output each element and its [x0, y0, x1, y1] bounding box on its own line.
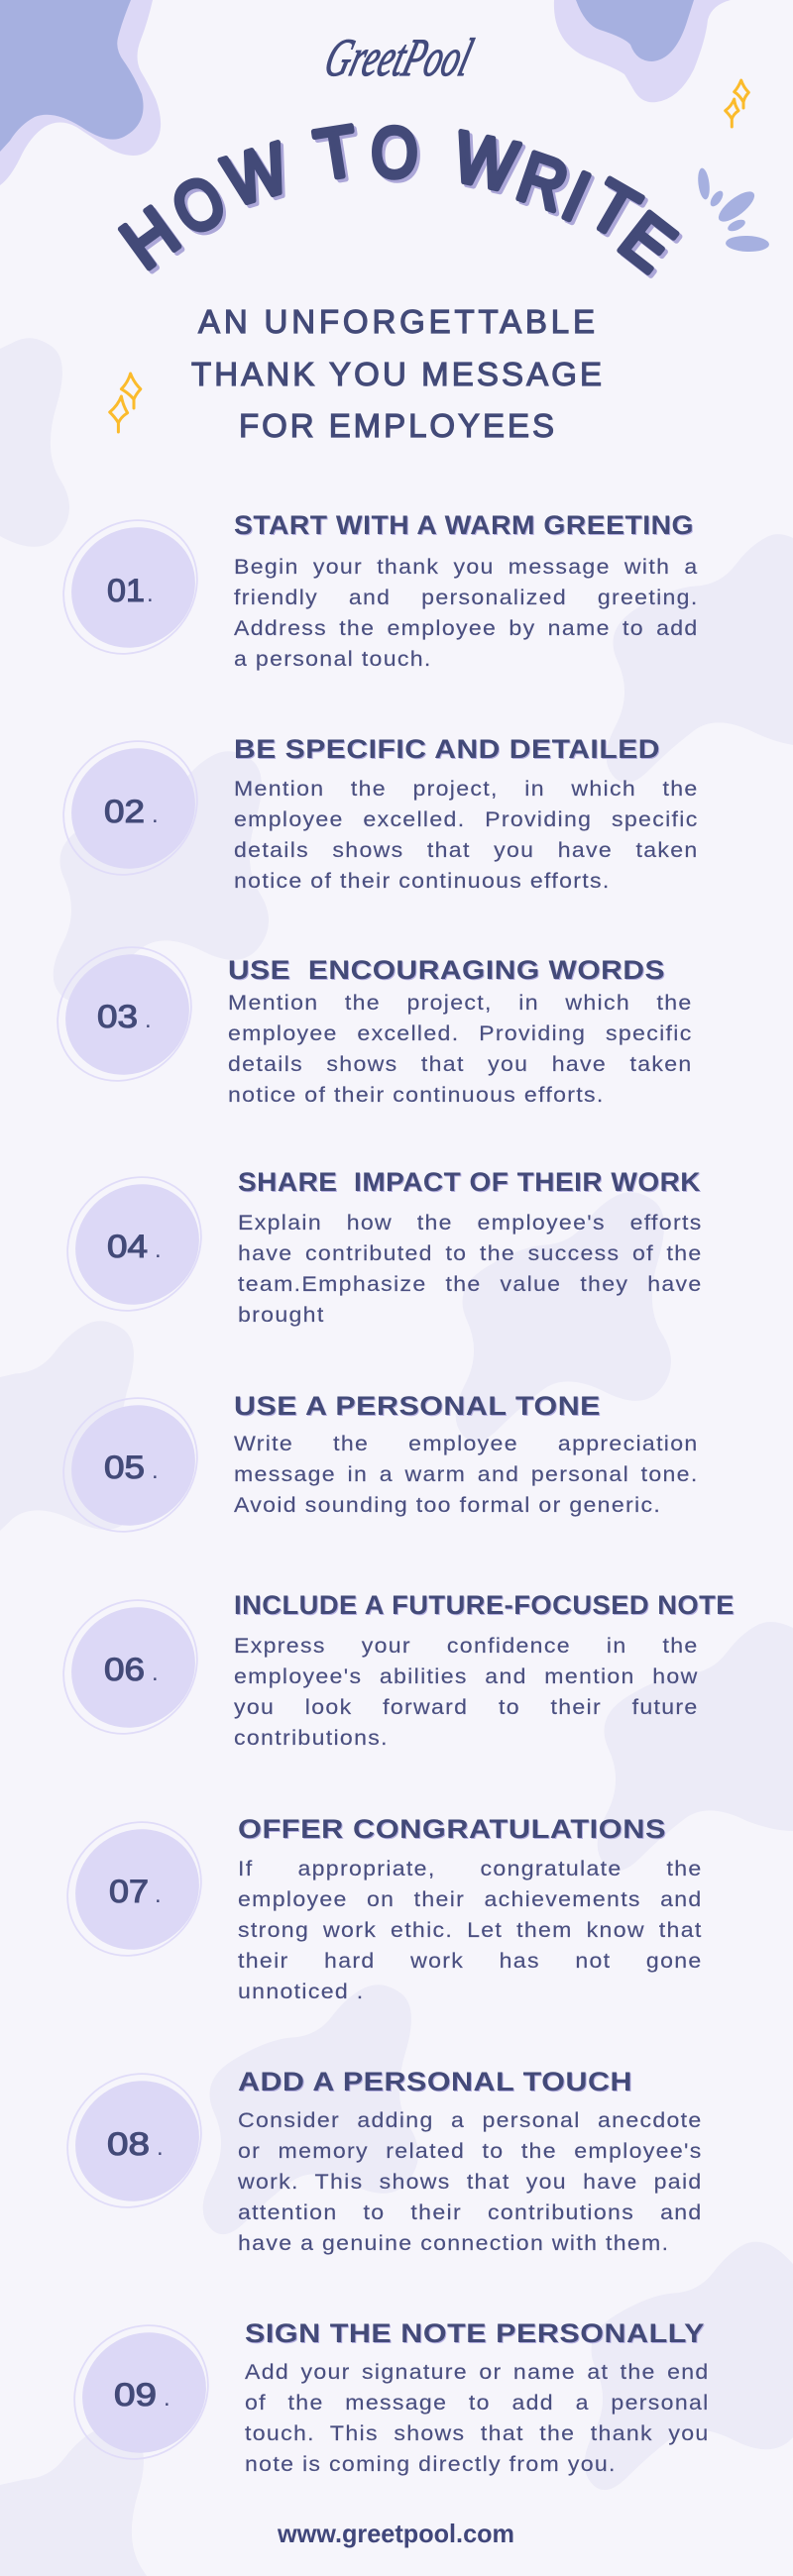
body text — [238, 1212, 703, 1327]
body text: their hard work has not gone — [238, 1950, 703, 1973]
number badge 07 — [66, 1821, 202, 1957]
number badge 01 — [62, 519, 198, 655]
number badge 01: 01 — [107, 573, 145, 608]
number badge 04: . — [155, 1236, 162, 1263]
number badge 07: 07 — [109, 1874, 149, 1909]
body text: unnoticed . — [238, 1981, 365, 2003]
body text: or memory related to the employee's — [238, 2140, 703, 2163]
body text: employee on their achievements and — [238, 1888, 703, 1911]
subtitle: FOR EMPLOYEES — [239, 407, 554, 444]
logo: GreetPool: GreetPool — [318, 29, 479, 88]
body text: details shows that you have taken — [234, 839, 699, 862]
body text: details shows that you have taken — [228, 1053, 693, 1076]
body text: employee's abilities and mention how — [234, 1665, 699, 1688]
step 02 — [62, 734, 699, 893]
number badge 06: 06 — [104, 1652, 145, 1687]
title: HOW TO WRITE arched: T — [310, 110, 363, 195]
number badge 06 — [62, 1599, 198, 1735]
body text: have contributed to the success of the — [238, 1242, 703, 1265]
heading: USE A PERSONAL TONE — [234, 1391, 601, 1421]
subtitle: AN UNFORGETTABLE — [198, 303, 595, 340]
body text: brought — [238, 1304, 325, 1327]
number badge 05 — [63, 1397, 198, 1533]
title: HOW TO WRITE arched: W — [215, 128, 297, 221]
title: HOW TO WRITE arched: O — [160, 159, 237, 251]
number badge 02: . — [152, 802, 159, 828]
body text — [234, 1433, 699, 1517]
heading: USE ENCOURAGING WORDS — [228, 955, 665, 985]
body text — [238, 1858, 703, 2003]
step 04 — [66, 1167, 703, 1327]
body text: contributions. — [234, 1727, 389, 1750]
heading: OFFER CONGRATULATIONS — [238, 1814, 666, 1844]
number badge 02 — [62, 740, 198, 876]
body text: work. This shows that you have paid — [238, 2171, 703, 2194]
title: HOW TO WRITE arched: T — [577, 164, 651, 254]
body text: team.Emphasize the value they have — [238, 1273, 703, 1296]
step 05 — [63, 1391, 699, 1533]
step 07 — [66, 1814, 703, 2003]
title: HOW TO WRITE arched: E — [606, 196, 690, 286]
number badge 05: 05 — [104, 1449, 145, 1485]
title: HOW TO WRITE arched: O — [372, 113, 417, 192]
title: HOW TO WRITE arched: R — [509, 138, 577, 227]
step 03 — [57, 947, 693, 1107]
number badge 09: . — [164, 2385, 170, 2412]
body text: strong work ethic. Let them know that — [238, 1919, 703, 1942]
body text: Avoid sounding too formal or generic. — [234, 1494, 661, 1517]
body text: Address the employee by name to add — [234, 617, 699, 640]
body text: attention to their contributions and — [238, 2201, 703, 2224]
body text — [234, 556, 699, 671]
body text — [234, 778, 699, 893]
number badge 08 — [66, 2073, 202, 2208]
body text: touch. This shows that the thank you — [245, 2422, 710, 2445]
body text: have a genuine connection with them. — [238, 2232, 669, 2255]
heading: BE SPECIFIC AND DETAILED — [234, 734, 660, 764]
number badge 09: 09 — [114, 2377, 157, 2413]
number badge 07: . — [155, 1881, 162, 1908]
body text: Express your confidence in the — [234, 1635, 699, 1658]
footer url: www.greetpool.com — [277, 2519, 514, 2548]
step 06 — [62, 1590, 735, 1750]
body text — [245, 2361, 710, 2476]
body text: Mention the project, in which the — [228, 992, 693, 1015]
body text: note is coming directly from you. — [245, 2453, 617, 2476]
body text: Consider adding a personal anecdote — [238, 2109, 703, 2132]
heading: ADD A PERSONAL TOUCH — [238, 2067, 632, 2096]
number badge 04: 04 — [107, 1229, 148, 1264]
body text: employee excelled. Providing specific — [234, 808, 699, 831]
step 08 — [66, 2067, 703, 2255]
number badge 03 — [57, 947, 192, 1082]
subtitle — [191, 303, 602, 444]
title: HOW TO WRITE arched: W — [447, 117, 524, 207]
heading: SHARE IMPACT OF THEIR WORK — [238, 1167, 701, 1197]
number badge 08: 08 — [107, 2126, 150, 2162]
heading: START WITH A WARM GREETING — [234, 510, 694, 540]
body text: Mention the project, in which the — [234, 778, 699, 801]
number badge 08: . — [157, 2134, 164, 2161]
number badge 09 — [73, 2324, 209, 2459]
body text: friendly and personalized greeting. — [234, 587, 699, 609]
body text: notice of their continuous efforts. — [228, 1084, 605, 1107]
body text: If appropriate, congratulate the — [238, 1858, 703, 1880]
number badge 01: . — [147, 581, 154, 607]
title: HOW TO WRITE arched: H — [107, 191, 192, 283]
number badge 06: . — [152, 1660, 159, 1686]
number badge 02: 02 — [104, 794, 145, 829]
subtitle: THANK YOU MESSAGE — [191, 356, 602, 392]
body text: employee excelled. Providing specific — [228, 1022, 693, 1045]
heading: INCLUDE A FUTURE-FOCUSED NOTE — [234, 1590, 735, 1620]
body text: you look forward to their future — [234, 1696, 699, 1719]
heading: SIGN THE NOTE PERSONALLY — [245, 2318, 705, 2348]
number badge 03: 03 — [97, 999, 138, 1034]
step 09 — [73, 2318, 710, 2476]
body text: Write the employee appreciation — [234, 1433, 699, 1455]
step 01 — [62, 510, 699, 671]
body text — [238, 2109, 703, 2255]
body text — [228, 992, 693, 1107]
number badge 05: . — [152, 1457, 159, 1484]
body text: of the message to add a personal — [245, 2392, 710, 2415]
body text — [234, 1635, 699, 1750]
title: HOW TO WRITE arched — [107, 110, 690, 286]
title: HOW TO WRITE arched: I — [552, 158, 600, 236]
body text: a personal touch. — [234, 648, 432, 671]
body text: Begin your thank you message with a — [234, 556, 699, 579]
body text: message in a warm and personal tone. — [234, 1463, 699, 1486]
body text: Explain how the employee's efforts — [238, 1212, 703, 1234]
body text: notice of their continuous efforts. — [234, 870, 611, 893]
body text: Add your signature or name at the end — [245, 2361, 710, 2384]
number badge 04 — [66, 1176, 202, 1312]
number badge 03: . — [145, 1007, 152, 1033]
